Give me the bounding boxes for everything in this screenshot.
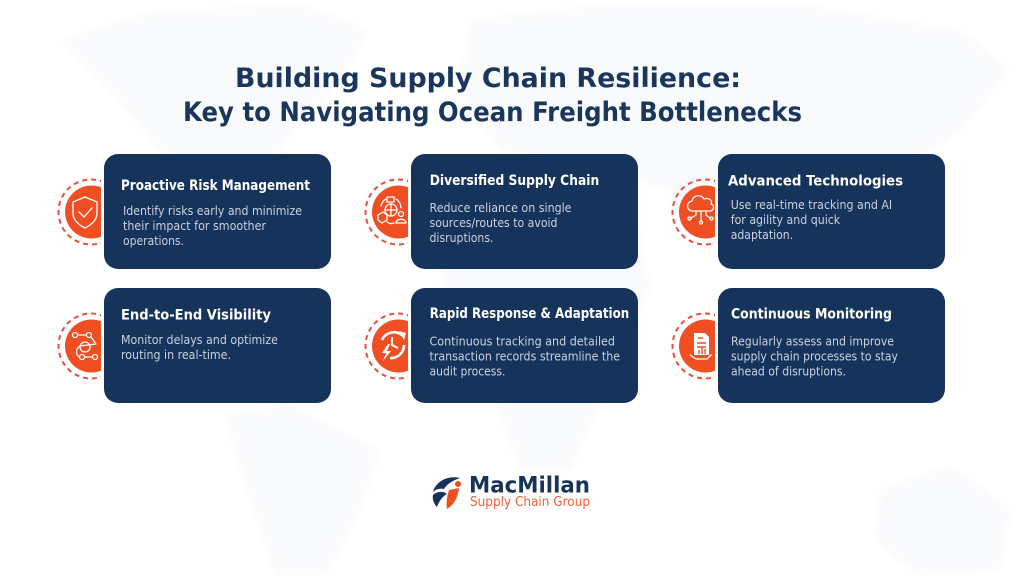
title: Key to Navigating Ocean Freight Bottlenecks (183, 97, 802, 128)
icon: shield with check (58, 178, 101, 246)
panel: Proactive Risk Management: operations. (123, 234, 184, 248)
panel: End-to-End Visibility (58, 288, 331, 403)
panel: Advanced Technologies: Use real-time tracking and AI (731, 198, 892, 212)
panel: Proactive Risk Management: their impact for smoother (123, 219, 266, 233)
panel: Diversified Supply Chain: Diversified Supply Chain (430, 173, 599, 189)
panel: Continuous Monitoring: ahead of disruptions. (731, 364, 846, 378)
panel: Advanced Technologies: adaptation. (731, 228, 793, 242)
icon: route with gear (58, 312, 101, 380)
panel: Rapid Response & Adaptation: Continuous tracking and detailed (430, 334, 615, 348)
panel: Continuous Monitoring: Continuous Monitoring (731, 306, 892, 322)
panel: Continuous Monitoring: supply chain processes to stay (731, 350, 898, 364)
panel: Continuous Monitoring (672, 288, 945, 403)
panel: Rapid Response & Adaptation: transaction records streamline the (430, 350, 620, 364)
panel: Advanced Technologies: for agility and quick (731, 213, 840, 227)
logo: MacMillan Supply Chain Group: MacMillan (469, 474, 590, 498)
title: Building Supply Chain Resilience: (235, 63, 741, 94)
panel: Rapid Response & Adaptation: Rapid Response & Adaptation (430, 306, 629, 322)
panel: Rapid Response & Adaptation (366, 288, 638, 403)
panel: Advanced Technologies (672, 154, 945, 269)
icon: globe network (364, 178, 408, 246)
icon: cloud network (672, 178, 715, 246)
panel: Advanced Technologies: Advanced Technologies (728, 174, 903, 190)
icon: refresh with clock and bolt (364, 312, 408, 380)
panel: Proactive Risk Management: Proactive Risk Management (121, 178, 310, 194)
panel: Rapid Response & Adaptation: audit process. (430, 364, 506, 378)
panel: End-to-End Visibility: End-to-End Visibility (121, 308, 271, 324)
panel: Continuous Monitoring: Regularly assess and improve (731, 334, 894, 348)
panel: Diversified Supply Chain: sources/routes to avoid (430, 216, 558, 230)
icon: logo mark (433, 477, 461, 509)
panel: Diversified Supply Chain: disruptions. (430, 231, 494, 245)
panel: Diversified Supply Chain (366, 154, 638, 269)
panel: End-to-End Visibility: Monitor delays and optimize (121, 333, 278, 347)
title (183, 63, 802, 128)
panel: End-to-End Visibility: routing in real-time. (121, 348, 231, 362)
logo: MacMillan Supply Chain Group: Supply Chain Group (470, 495, 590, 510)
icon: report in hand (672, 312, 715, 380)
panel: Proactive Risk Management: Identify risks early and minimize (123, 204, 302, 218)
logo: MacMillan Supply Chain Group (433, 474, 590, 510)
panel: Proactive Risk Management (58, 154, 331, 269)
panel: Diversified Supply Chain: Reduce reliance on single (430, 201, 572, 215)
